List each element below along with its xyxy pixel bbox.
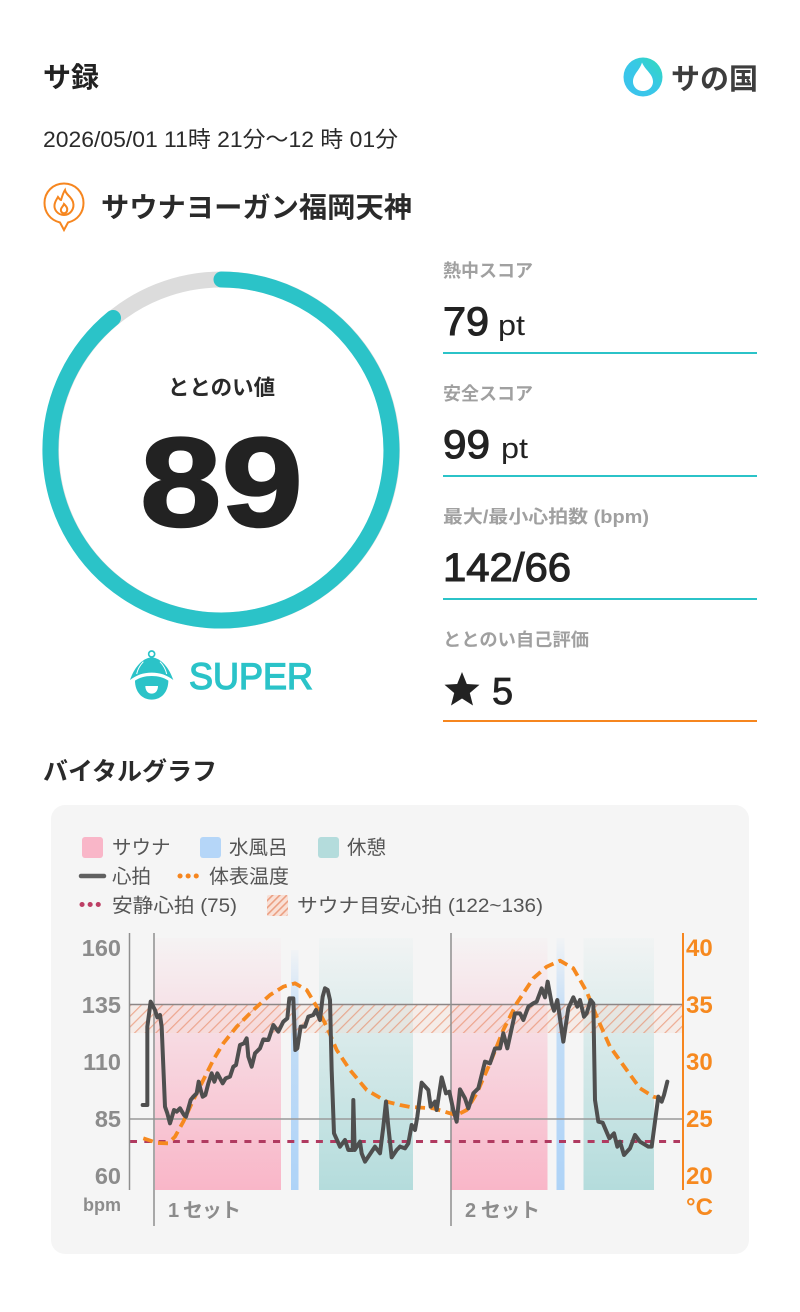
target heart rate band (130, 1005, 682, 1033)
panel: vital graph (51, 805, 749, 1254)
stat: 安全スコア (443, 384, 757, 477)
gauge track (51, 280, 392, 620)
date and time: 2026/05/01 11時 21分～12 時 01分 (43, 127, 398, 152)
gauge value arc (50, 280, 391, 620)
set 1 marker (153, 933, 155, 1226)
phase band: sauna set 1 (155, 938, 281, 1190)
icon: logo water drop (624, 58, 662, 96)
legend: rest (318, 837, 386, 859)
rank: SUPER (130, 651, 313, 700)
stat: 安全スコア: pt (501, 433, 528, 465)
legend: sauna (82, 837, 171, 859)
title: サ録 (43, 62, 99, 93)
left axis labels: bpm: 135 (82, 992, 121, 1018)
stat: 安全スコア: 99 (443, 423, 490, 467)
stat: 熱中スコア: 79 (443, 300, 489, 344)
gauge label: ととのい値 (168, 376, 275, 400)
left axis labels: bpm: 160 (82, 935, 121, 961)
stat: 熱中スコア: 熱中スコア (443, 261, 533, 281)
right axis (682, 933, 684, 1190)
left axis labels: bpm: bpm (83, 1195, 121, 1215)
legend: sauna: サウナ (112, 837, 171, 859)
heart rate line (143, 982, 667, 1162)
body surface temperature line (143, 961, 668, 1143)
stat: 最大/最小心拍数: 142/66 (443, 546, 571, 590)
stat: ととのい自己評価 (443, 630, 757, 722)
legend: heart rate (81, 866, 151, 888)
stat: 安全スコア: 安全スコア (443, 384, 533, 404)
icon: star (444, 672, 480, 706)
resting heart rate line (130, 1140, 680, 1143)
left axis labels: bpm (82, 935, 121, 1215)
rank text: SUPER (189, 656, 313, 697)
left axis labels: bpm: 60 (95, 1163, 121, 1189)
legend: target heart rate zone: サウナ目安心拍 (122~136) (297, 895, 543, 917)
gauge number: 89 (140, 411, 303, 553)
right axis labels: temperature: 30 (686, 1049, 713, 1076)
legend (81, 837, 543, 917)
legend: cold bath (200, 837, 288, 859)
phase band: cold bath set 1 (291, 950, 298, 1190)
stat: 最大/最小心拍数 (443, 507, 757, 600)
stat: 熱中スコア (443, 261, 757, 354)
facility name: サウナヨーガン福岡天神 (101, 192, 412, 223)
left axis (128, 933, 130, 1190)
right axis labels: temperature: °C (686, 1194, 713, 1221)
icon: sauna flame pin (44, 184, 84, 230)
phase band: sauna set 2 (451, 938, 548, 1190)
chart (82, 933, 713, 1226)
left axis labels: bpm: 85 (95, 1106, 121, 1132)
legend: rest: 休憩 (347, 837, 386, 859)
phase band: rest set 2 (584, 938, 654, 1190)
right axis labels: temperature (686, 935, 713, 1221)
logo: サの国 (624, 58, 758, 96)
left axis labels: bpm: 110 (83, 1049, 121, 1075)
set 2 marker (450, 933, 452, 1226)
right axis labels: temperature: 35 (686, 992, 713, 1019)
right axis labels: temperature: 20 (686, 1163, 713, 1190)
right axis labels: temperature: 40 (686, 935, 713, 962)
stat: 最大/最小心拍数: 最大/最小心拍数 (bpm) (443, 507, 649, 527)
legend: body surface temperature: 体表温度 (209, 866, 289, 888)
phase band: cold bath set 2 (556, 938, 564, 1190)
stat: 熱中スコア: pt (498, 310, 525, 342)
legend: resting heart rate: 安静心拍 (75) (112, 895, 237, 917)
stat: ととのい自己評価: ととのい自己評価 (443, 630, 589, 650)
set label 2: 2 セット (465, 1200, 540, 1222)
phase band: rest set 1 (319, 938, 413, 1190)
heading: バイタルグラフ: バイタルグラフ (43, 757, 217, 786)
legend: cold bath: 水風呂 (229, 837, 288, 859)
legend: heart rate: 心拍 (112, 866, 151, 888)
icon: sauna hat character (130, 651, 173, 700)
logo: サの国: サの国 (671, 64, 758, 96)
right axis labels: temperature: 25 (686, 1106, 713, 1133)
stat: ととのい自己評価: 5 (492, 671, 513, 713)
set label 1: 1 セット (168, 1200, 241, 1222)
gauge: ととのい値 (50, 280, 392, 620)
